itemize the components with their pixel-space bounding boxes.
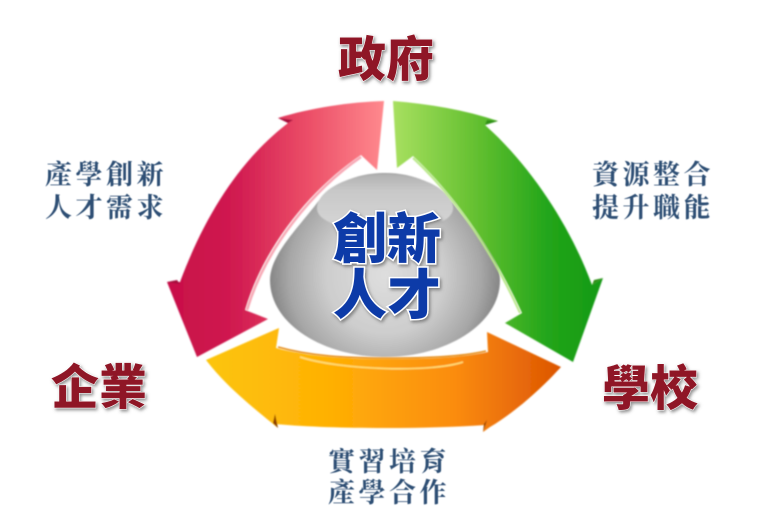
heading: 政府: 政府	[338, 34, 434, 87]
sphere highlight	[317, 174, 453, 230]
heading: 學校: 學校	[602, 363, 698, 416]
center heading: 創新人才: 人才	[333, 266, 441, 326]
green arrow inner rim	[413, 158, 520, 313]
green arrow barbs	[485, 120, 603, 285]
text block: 資源整合 提升職能	[592, 160, 714, 223]
center heading: 創新人才	[333, 210, 441, 326]
text block: 產學創新 人才需求: 產學創新	[45, 159, 167, 190]
arrow: green, government to school	[393, 101, 603, 362]
arrow: orange, enterprise and school	[206, 328, 561, 432]
text block: 資源整合 提升職能: 資源整合	[592, 160, 714, 190]
text block: 實習培育 產學合作: 產學合作	[328, 477, 450, 508]
orange arrow barbs	[273, 414, 487, 432]
text block: 實習培育 產學合作: 實習培育	[328, 447, 450, 477]
text block: 產學創新 人才需求: 人才需求	[45, 193, 167, 223]
arrow: red, government to enterprise	[167, 101, 384, 357]
center heading: 創新人才: 創新	[333, 210, 441, 270]
red arrow inner rim	[247, 157, 361, 310]
text block: 實習培育 產學合作	[328, 447, 450, 508]
orange arrow inner rim	[278, 347, 486, 358]
sphere: central grey ball	[270, 173, 500, 357]
text block: 資源整合 提升職能: 提升職能	[592, 192, 714, 223]
red arrow barbs	[167, 118, 293, 284]
heading: 企業: 企業	[51, 362, 147, 415]
text block: 產學創新 人才需求	[45, 159, 167, 223]
